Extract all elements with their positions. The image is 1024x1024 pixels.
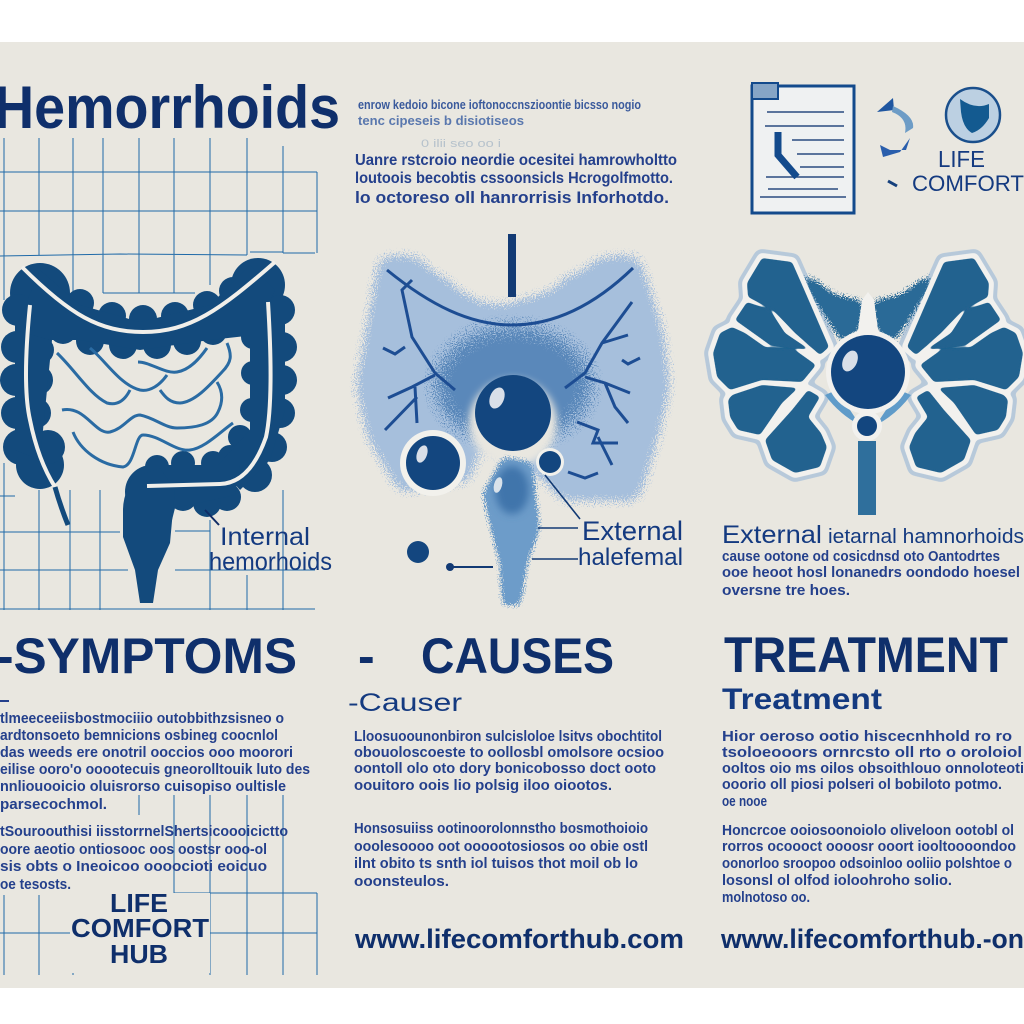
right caption	[722, 521, 1024, 599]
label: external: External	[582, 516, 683, 546]
subheading: causer: -Causer	[348, 689, 462, 717]
text block: treatment: Hior oeroso ootio hiscecnhhold ro ro	[722, 729, 1012, 745]
right caption: oversne tre hoes.	[722, 583, 850, 599]
right caption: External	[722, 521, 822, 549]
text block: treatment: tsoloeooors ornrcsto oll rto o oroloiol	[722, 745, 1022, 761]
text block: symptoms: sis obts o Ineoicoo oooocioti eoicuo	[0, 859, 267, 875]
right caption: ooe heoot hosl lonanedrs oondodo hoesel	[722, 565, 1020, 581]
logo text: life comfort: LIFE	[938, 146, 985, 172]
icon: clipboard document	[752, 83, 854, 213]
label: internal hemorrhoids	[209, 523, 332, 576]
website url center: www.lifecomforthub.com	[354, 924, 684, 954]
logo: life comfort hub: HUB	[110, 939, 168, 969]
text block: treatment	[722, 729, 1024, 906]
label: external: halefemal	[578, 544, 683, 571]
intro text: enrow kedoio bicone ioftonoccnszioontie bicsso nogio	[358, 97, 641, 112]
text block: treatment: ooorio oll piosi polseri ol bobiloto potmo.	[722, 777, 1002, 793]
intro text	[355, 97, 677, 207]
logo: life comfort hub: LIFE	[110, 888, 168, 918]
right caption: cause ootone od cosicdnsd oto Oantodrtes	[722, 549, 1000, 565]
text block: symptoms: eilise ooro'o ooootecuis gneorolltouik luto des	[0, 762, 310, 778]
logo: life comfort hub: COMFORT	[71, 913, 209, 943]
label: internal hemorrhoids: Internal	[220, 523, 310, 551]
text block: causes: oontoll olo oto dory bonicobosso doct ooto	[354, 761, 656, 777]
text block: symptoms: tlmeeceeiisbostmociiio outobbithzsisneo o	[0, 711, 284, 727]
title: Hemorrhoids	[0, 74, 340, 141]
intro text: loutoois becobtis cssoonsicls Hcrogolfmotto.	[355, 170, 673, 187]
logo: life comfort hub	[70, 888, 210, 973]
text block: causes	[354, 729, 664, 890]
text block: causes: obouoloscoeste to oollosbl omolsore ocsioo	[354, 745, 664, 761]
text block: causes: oouitoro oois lio polsig iloo oiootos.	[354, 778, 612, 794]
text block: causes: ilnt obito ts snth iol tuisos thot moil ob lo	[354, 856, 638, 872]
text block: treatment: oe nooe	[722, 794, 767, 810]
text block: treatment: ooltos oio ms oilos obsoithlouo onnoloteoti	[722, 761, 1024, 777]
central anatomy illustration	[357, 234, 669, 605]
text block: treatment: Honcrcoe ooiosoonoiolo oliveloon ootobl ol	[722, 823, 1014, 839]
logo text: life comfort: COMFORT	[912, 171, 1024, 196]
right caption: ietarnal hamnorhoids	[828, 526, 1024, 548]
right flower illustration	[713, 258, 1023, 515]
text block: symptoms: tSouroouthisi iisstorrnelShertsicoooicictto	[0, 824, 288, 840]
logo text: life comfort	[912, 146, 1024, 196]
subheading: treatment: Treatment	[722, 683, 882, 716]
colon illustration	[0, 258, 297, 603]
heading: causes: CAUSES	[421, 628, 614, 684]
text block: symptoms: das weeds ere onotril ooccios ooo moorori	[0, 745, 293, 761]
text block: causes: Lloosuoounonbiron sulcisloloe lsitvs obochtitol	[354, 729, 662, 745]
intro text: lo octoreso oll hanrorrisis Inforhotdo.	[355, 188, 669, 207]
website url right: www.lifecomforthub.-on	[720, 924, 1024, 954]
icon: shield badge	[946, 88, 1000, 142]
text block: symptoms: oore aeotio ontiosooc oos oostsr ooo-ol	[0, 842, 267, 858]
text block: symptoms: oe tesosts.	[0, 877, 71, 893]
text block: causes: ooolesoooo oot oooootosiosos oo obie ostl	[354, 839, 648, 855]
text block: causes: Honsosuiiss ootinoorolonnstho bosmothoioio	[354, 821, 648, 837]
external hemorrhoid circle left	[400, 430, 466, 496]
label: internal hemorrhoids: hemorhoids	[209, 548, 332, 576]
heading: causes dash: -	[358, 628, 375, 684]
text block: symptoms	[0, 711, 310, 893]
dash mark	[0, 700, 9, 702]
text block: treatment: molnotoso oo.	[722, 890, 810, 906]
text block: symptoms: nnliouooicio oluisrorso cuisopiso oultisle	[0, 779, 286, 795]
intro text: 0 ilii seo oo i	[421, 138, 501, 150]
text block: treatment: losonsl ol olfod ioloohroho solio.	[722, 873, 952, 889]
text block: symptoms: parsecochmol.	[0, 797, 107, 813]
text block: causes: ooonsteulos.	[354, 874, 449, 890]
intro text: Uanre rstcroio neordie ocesitei hamrowholtto	[355, 152, 677, 169]
text block: treatment: rorros ocoooct oooosr ooort iooltoooondoo	[722, 839, 1016, 855]
heading: symptoms: -SYMPTOMS	[0, 628, 297, 684]
icon: arrow fragments	[877, 98, 913, 186]
intro text: tenc cipeseis b disiotiseos	[358, 113, 524, 128]
label: external	[578, 516, 683, 571]
heading: treatment: TREATMENT	[724, 627, 1008, 683]
text block: symptoms: ardtonsoeto bemnicions osbineg coocnlol	[0, 728, 278, 744]
